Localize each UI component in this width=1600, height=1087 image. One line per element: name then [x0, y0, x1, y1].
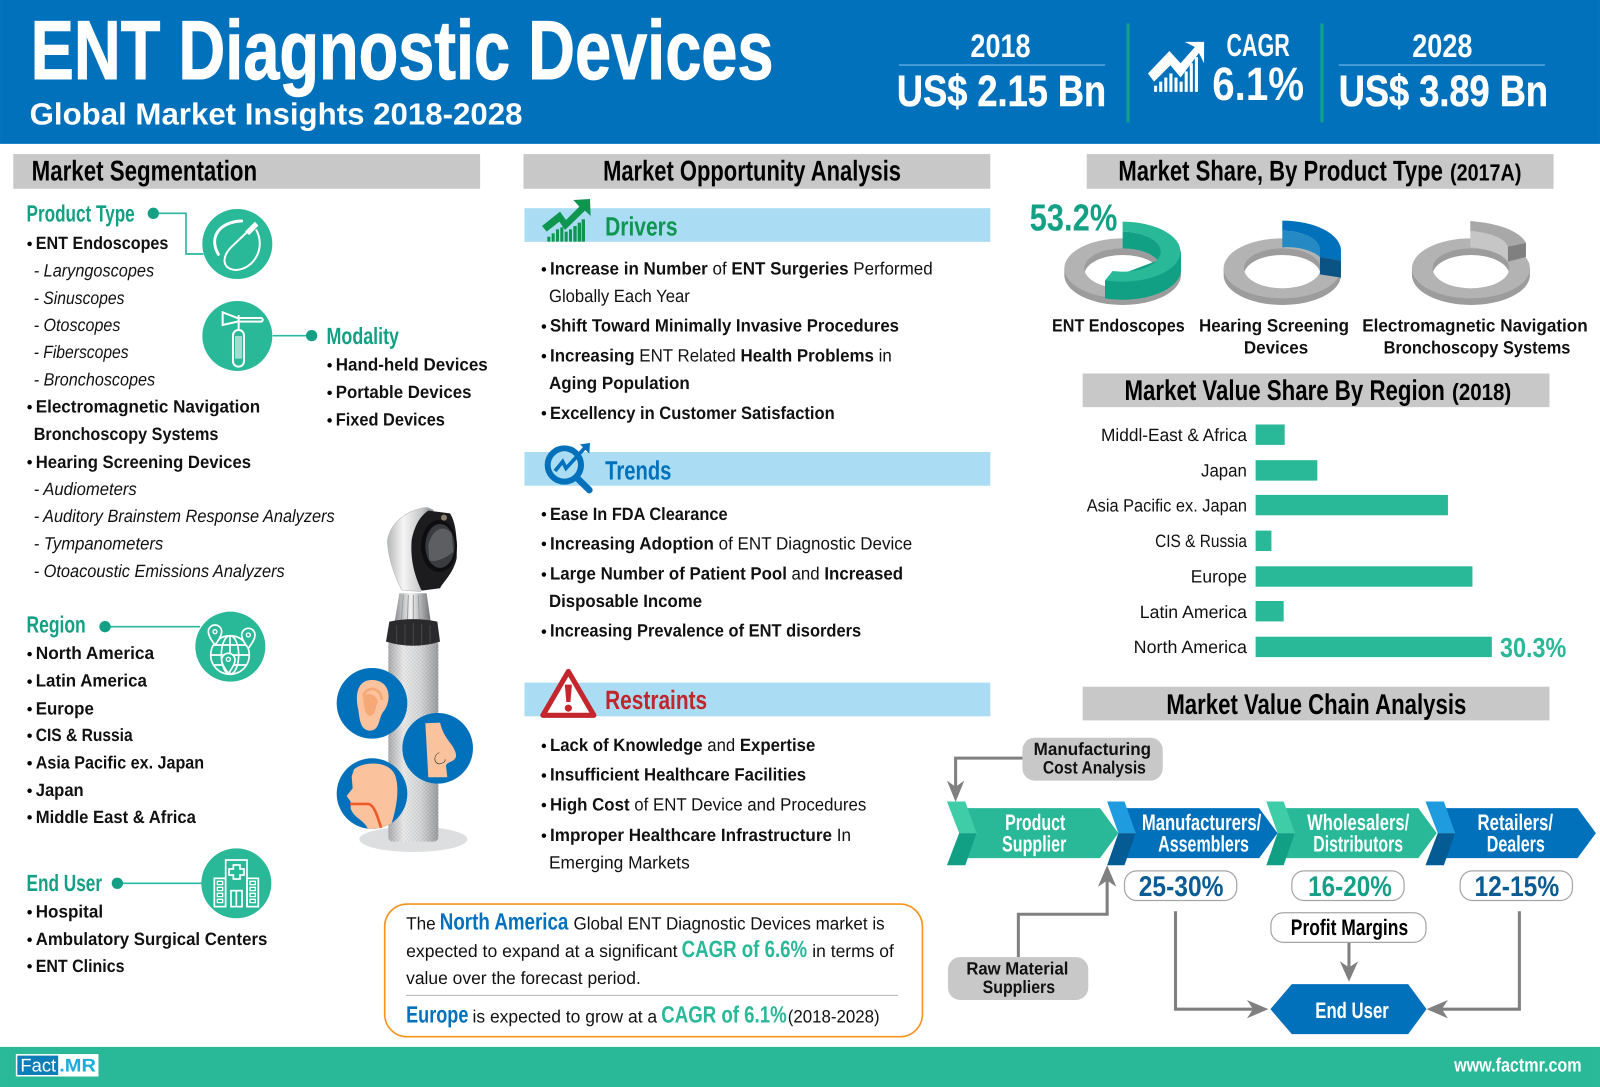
logo: Fact.MR: .MR: [59, 1055, 96, 1075]
heading: Market Segmentation: [13, 154, 480, 189]
list: drivers: Increasing ENT Related Health Problems in: [550, 345, 892, 366]
list: region: Japan: [36, 780, 84, 800]
list: trends: Increasing Adoption of ENT Diagnostic Device: [550, 533, 912, 554]
list: drivers: Shift Toward Minimally Invasive Procedures: [550, 315, 899, 336]
list: restraints: [542, 735, 867, 872]
list: region: Europe: [36, 698, 94, 718]
chevron: Product Supplier: Supplier: [1002, 831, 1067, 857]
callout: regional CAGR: value over the forecast period.: [406, 968, 641, 988]
heading: Market Value Share By Region: Market Value Share By Region: [1124, 374, 1445, 406]
icon: region globe: [99, 612, 265, 682]
stat: 2028 value: 2028: [1412, 28, 1472, 64]
panel: value chain: [947, 738, 1596, 1034]
heading: Restraints: Restraints: [605, 685, 707, 715]
box: Raw Material Suppliers: Suppliers: [983, 977, 1055, 997]
box: Manufacturing Cost Analysis: Manufacturing: [1034, 739, 1151, 759]
callout: regional CAGR: CAGR of 6.6%: [682, 936, 807, 962]
icon: growth arrow: [1148, 42, 1204, 92]
icon: throat: [337, 758, 407, 830]
pill: Profit Margins: Profit Margins: [1291, 915, 1408, 940]
heading: Market Opportunity Analysis: Market Opportunity Analysis: [603, 155, 901, 187]
donut labels: Bronchoscopy Systems: [1384, 337, 1571, 358]
divider right: [1320, 23, 1323, 122]
chevron: Retailers/Dealers: Retailers/: [1478, 810, 1553, 835]
list: trends: Ease In FDA Clearance: [550, 504, 728, 524]
chevron: Product Supplier: [947, 802, 1118, 865]
list: modality: Portable Devices: [336, 382, 472, 402]
list: product type: - Audiometers: [34, 479, 137, 499]
list: drivers: Aging Population: [549, 372, 690, 393]
list: end user: Ambulatory Surgical Centers: [36, 929, 268, 949]
list: drivers: Excellency in Customer Satisfaction: [550, 403, 835, 423]
donut labels: ENT Endoscopes: [1052, 315, 1185, 336]
bar chart: value share by region: Japan: [1201, 460, 1247, 481]
list: drivers: Increase in Number of ENT Surgeries Performed: [550, 258, 933, 279]
chevron: Retailers/Dealers: Dealers: [1487, 831, 1545, 857]
pill: 12-15%: 12-15%: [1474, 870, 1559, 902]
callout: regional CAGR: expected to expand at a significant: [406, 941, 678, 961]
pill: 16-20%: 16-20%: [1308, 870, 1392, 902]
donut labels: Devices: [1244, 337, 1308, 358]
list: product type: - Fiberscopes: [34, 342, 129, 362]
donut labels: Electromagnetic Navigation: [1362, 315, 1588, 336]
callout: regional CAGR: [385, 904, 922, 1037]
chevron: Manufacturers/Assemblers: Manufacturers/: [1142, 810, 1261, 835]
donut labels: [1052, 315, 1588, 358]
chevron: Retailers/Dealers: [1425, 802, 1596, 865]
icon: trends magnifier: [548, 443, 590, 490]
footer band: [0, 1047, 1600, 1087]
list: product type: Hearing Screening Devices: [36, 452, 251, 472]
heading: Modality: Modality: [327, 322, 399, 349]
value label 53.2%: 53.2%: [1030, 197, 1117, 239]
donut labels: Hearing Screening: [1199, 315, 1349, 336]
bar chart: value share by region: CIS & Russia: [1155, 531, 1247, 551]
box: Manufacturing Cost Analysis: [1022, 738, 1163, 781]
stat: CAGR: CAGR: [1227, 28, 1290, 63]
list: restraints: Improper Healthcare Infrastructure In: [550, 824, 851, 845]
stat: 2018 value: 2018: [970, 28, 1031, 64]
subtitle: Global Market Insights 2018-2028: [30, 98, 522, 132]
list: region: North America: [36, 643, 154, 663]
list: restraints: Lack of Knowledge and Expertise: [550, 735, 816, 755]
list: end user: [27, 901, 268, 976]
list: drivers: Globally Each Year: [549, 286, 690, 306]
heading: Market Segmentation: Market Segmentation: [32, 155, 257, 187]
logo: Fact.MR: [16, 1054, 98, 1077]
connector arrows: [956, 758, 1519, 1009]
list: trends: Disposable Income: [549, 591, 702, 611]
stat: CAGR: [1212, 28, 1304, 110]
list: region: Latin America: [36, 670, 147, 691]
chart: market share donuts: [1030, 197, 1588, 358]
list: end user: ENT Clinics: [36, 956, 125, 976]
list: product type: Electromagnetic Navigation: [36, 396, 260, 417]
list: drivers: [542, 258, 933, 423]
icon: drivers arrow: [542, 199, 591, 242]
list: product type: - Auditory Brainstem Response Analyzers: [34, 506, 335, 526]
list: modality: [327, 354, 488, 430]
list: modality: Fixed Devices: [336, 409, 445, 430]
chevron: Manufacturers/Assemblers: Assemblers: [1158, 831, 1249, 857]
donut: Electromagnetic Navigation: [1412, 221, 1530, 305]
heading: Market Value Chain Analysis: Market Value Chain Analysis: [1166, 688, 1466, 720]
callout: regional CAGR: Europe: [406, 1001, 468, 1028]
bar chart: value share by region: [1087, 424, 1566, 663]
list: product type: - Sinuscopes: [34, 288, 125, 308]
divider left: [1127, 23, 1130, 122]
box: Raw Material Suppliers: Raw Material: [966, 958, 1068, 979]
list: product type: - Otoscopes: [34, 315, 121, 335]
pill: Profit Margins: [1271, 913, 1426, 942]
heading: Trends: Trends: [605, 455, 671, 486]
chevron: Wholesalers/Distributors: [1266, 802, 1437, 865]
list: region: CIS & Russia: [36, 724, 133, 745]
chevron: Product Supplier: Product: [1005, 810, 1066, 835]
hexagon: End User: End User: [1315, 997, 1389, 1023]
list: product type: - Otoacoustic Emissions Analyzers: [34, 561, 285, 581]
callout: regional CAGR: CAGR of 6.1%: [661, 1001, 787, 1028]
callout: regional CAGR: in terms of: [812, 941, 894, 961]
logo: Fact.MR: Fact: [20, 1055, 56, 1075]
list: restraints: High Cost of ENT Device and Procedures: [550, 794, 867, 815]
chevron: Wholesalers/Distributors: Distributors: [1313, 831, 1403, 857]
list: product type: - Tympanometers: [34, 533, 164, 554]
callout: regional CAGR: The: [406, 913, 436, 934]
box: Manufacturing Cost Analysis: Cost Analysis: [1043, 757, 1146, 778]
panel: segmentation: [27, 200, 488, 976]
heading: Product Type: Product Type: [27, 200, 135, 227]
list: modality: Hand-held Devices: [336, 354, 488, 374]
header band: [0, 0, 1600, 144]
heading: Region: Region: [27, 611, 86, 638]
title: ENT Diagnostic Devices: [31, 5, 773, 97]
list: trends: [542, 504, 912, 641]
heading: Drivers: Drivers: [605, 211, 678, 242]
list: product type: Bronchoscopy Systems: [34, 423, 219, 444]
chevron: Wholesalers/Distributors: Wholesalers/: [1307, 810, 1409, 835]
icon: ear: [337, 668, 407, 739]
panel: trends: [524, 443, 990, 641]
list: restraints: Emerging Markets: [549, 852, 690, 872]
callout: regional CAGR: is expected to grow at a: [472, 1006, 657, 1027]
chevron: Manufacturers/Assemblers: [1107, 802, 1278, 865]
heading: Market Share by Product Type: (2017A): [1450, 159, 1521, 186]
bar chart: value share by region: Asia Pacific ex. Japan: [1087, 495, 1247, 516]
box: Raw Material Suppliers: [948, 957, 1088, 1000]
bar chart: value share by region: Latin America: [1140, 602, 1247, 622]
stat: CAGR: 6.1%: [1212, 57, 1304, 110]
callout: regional CAGR: (2018-2028): [788, 1006, 880, 1027]
stat: 2028 value: US$ 3.89 Bn: [1339, 67, 1548, 116]
list: trends: Increasing Prevalence of ENT disorders: [550, 620, 861, 641]
list: region: Asia Pacific ex. Japan: [36, 752, 204, 772]
list: restraints: Insufficient Healthcare Facilities: [550, 764, 806, 785]
heading: Market Share by Product Type: Market Share, By Product Type: [1118, 155, 1443, 187]
list: product type: - Laryngoscopes: [34, 260, 154, 281]
hexagon: End User: [1270, 984, 1427, 1034]
icon: warning triangle: [543, 671, 594, 715]
icon: hospital: [112, 848, 271, 918]
callout: regional CAGR: North America: [440, 908, 569, 935]
callout: regional CAGR: Global ENT Diagnostic Devices market is: [573, 913, 885, 934]
panel: drivers: [524, 199, 990, 423]
heading: End User: End User: [27, 869, 102, 896]
stat: 2018 value: US$ 2.15 Bn: [897, 67, 1106, 116]
bar chart: value share by region: North America: [1134, 637, 1247, 657]
list: trends: Large Number of Patient Pool and Increased: [550, 563, 903, 584]
product type connector and icons: [148, 208, 317, 371]
stat: 2018 value: [897, 28, 1106, 116]
value label 30.3%: 30.3%: [1500, 633, 1566, 663]
donut: ENT Endoscopes: [1064, 222, 1181, 305]
icon: nose: [402, 713, 473, 784]
heading: Market Value Share By Region: (2018): [1452, 379, 1511, 405]
bar chart: value share by region: Middl-East & Africa: [1101, 424, 1247, 445]
list: region: Middle East & Africa: [36, 807, 196, 827]
list: end user: Hospital: [36, 901, 103, 921]
pill: 25-30%: 25-30%: [1139, 870, 1224, 902]
stat: 2028 value: [1339, 28, 1548, 116]
list: product type: - Bronchoscopes: [34, 369, 155, 390]
list: product type: [27, 233, 335, 581]
list: region: [27, 643, 204, 827]
bar chart: value share by region: Europe: [1191, 566, 1247, 587]
panel: restraints: [524, 671, 990, 872]
donut: Hearing Screening: [1224, 221, 1341, 305]
list: product type: ENT Endoscopes: [36, 233, 169, 253]
illustration: otoscope with ear, nose, throat: [337, 507, 473, 852]
